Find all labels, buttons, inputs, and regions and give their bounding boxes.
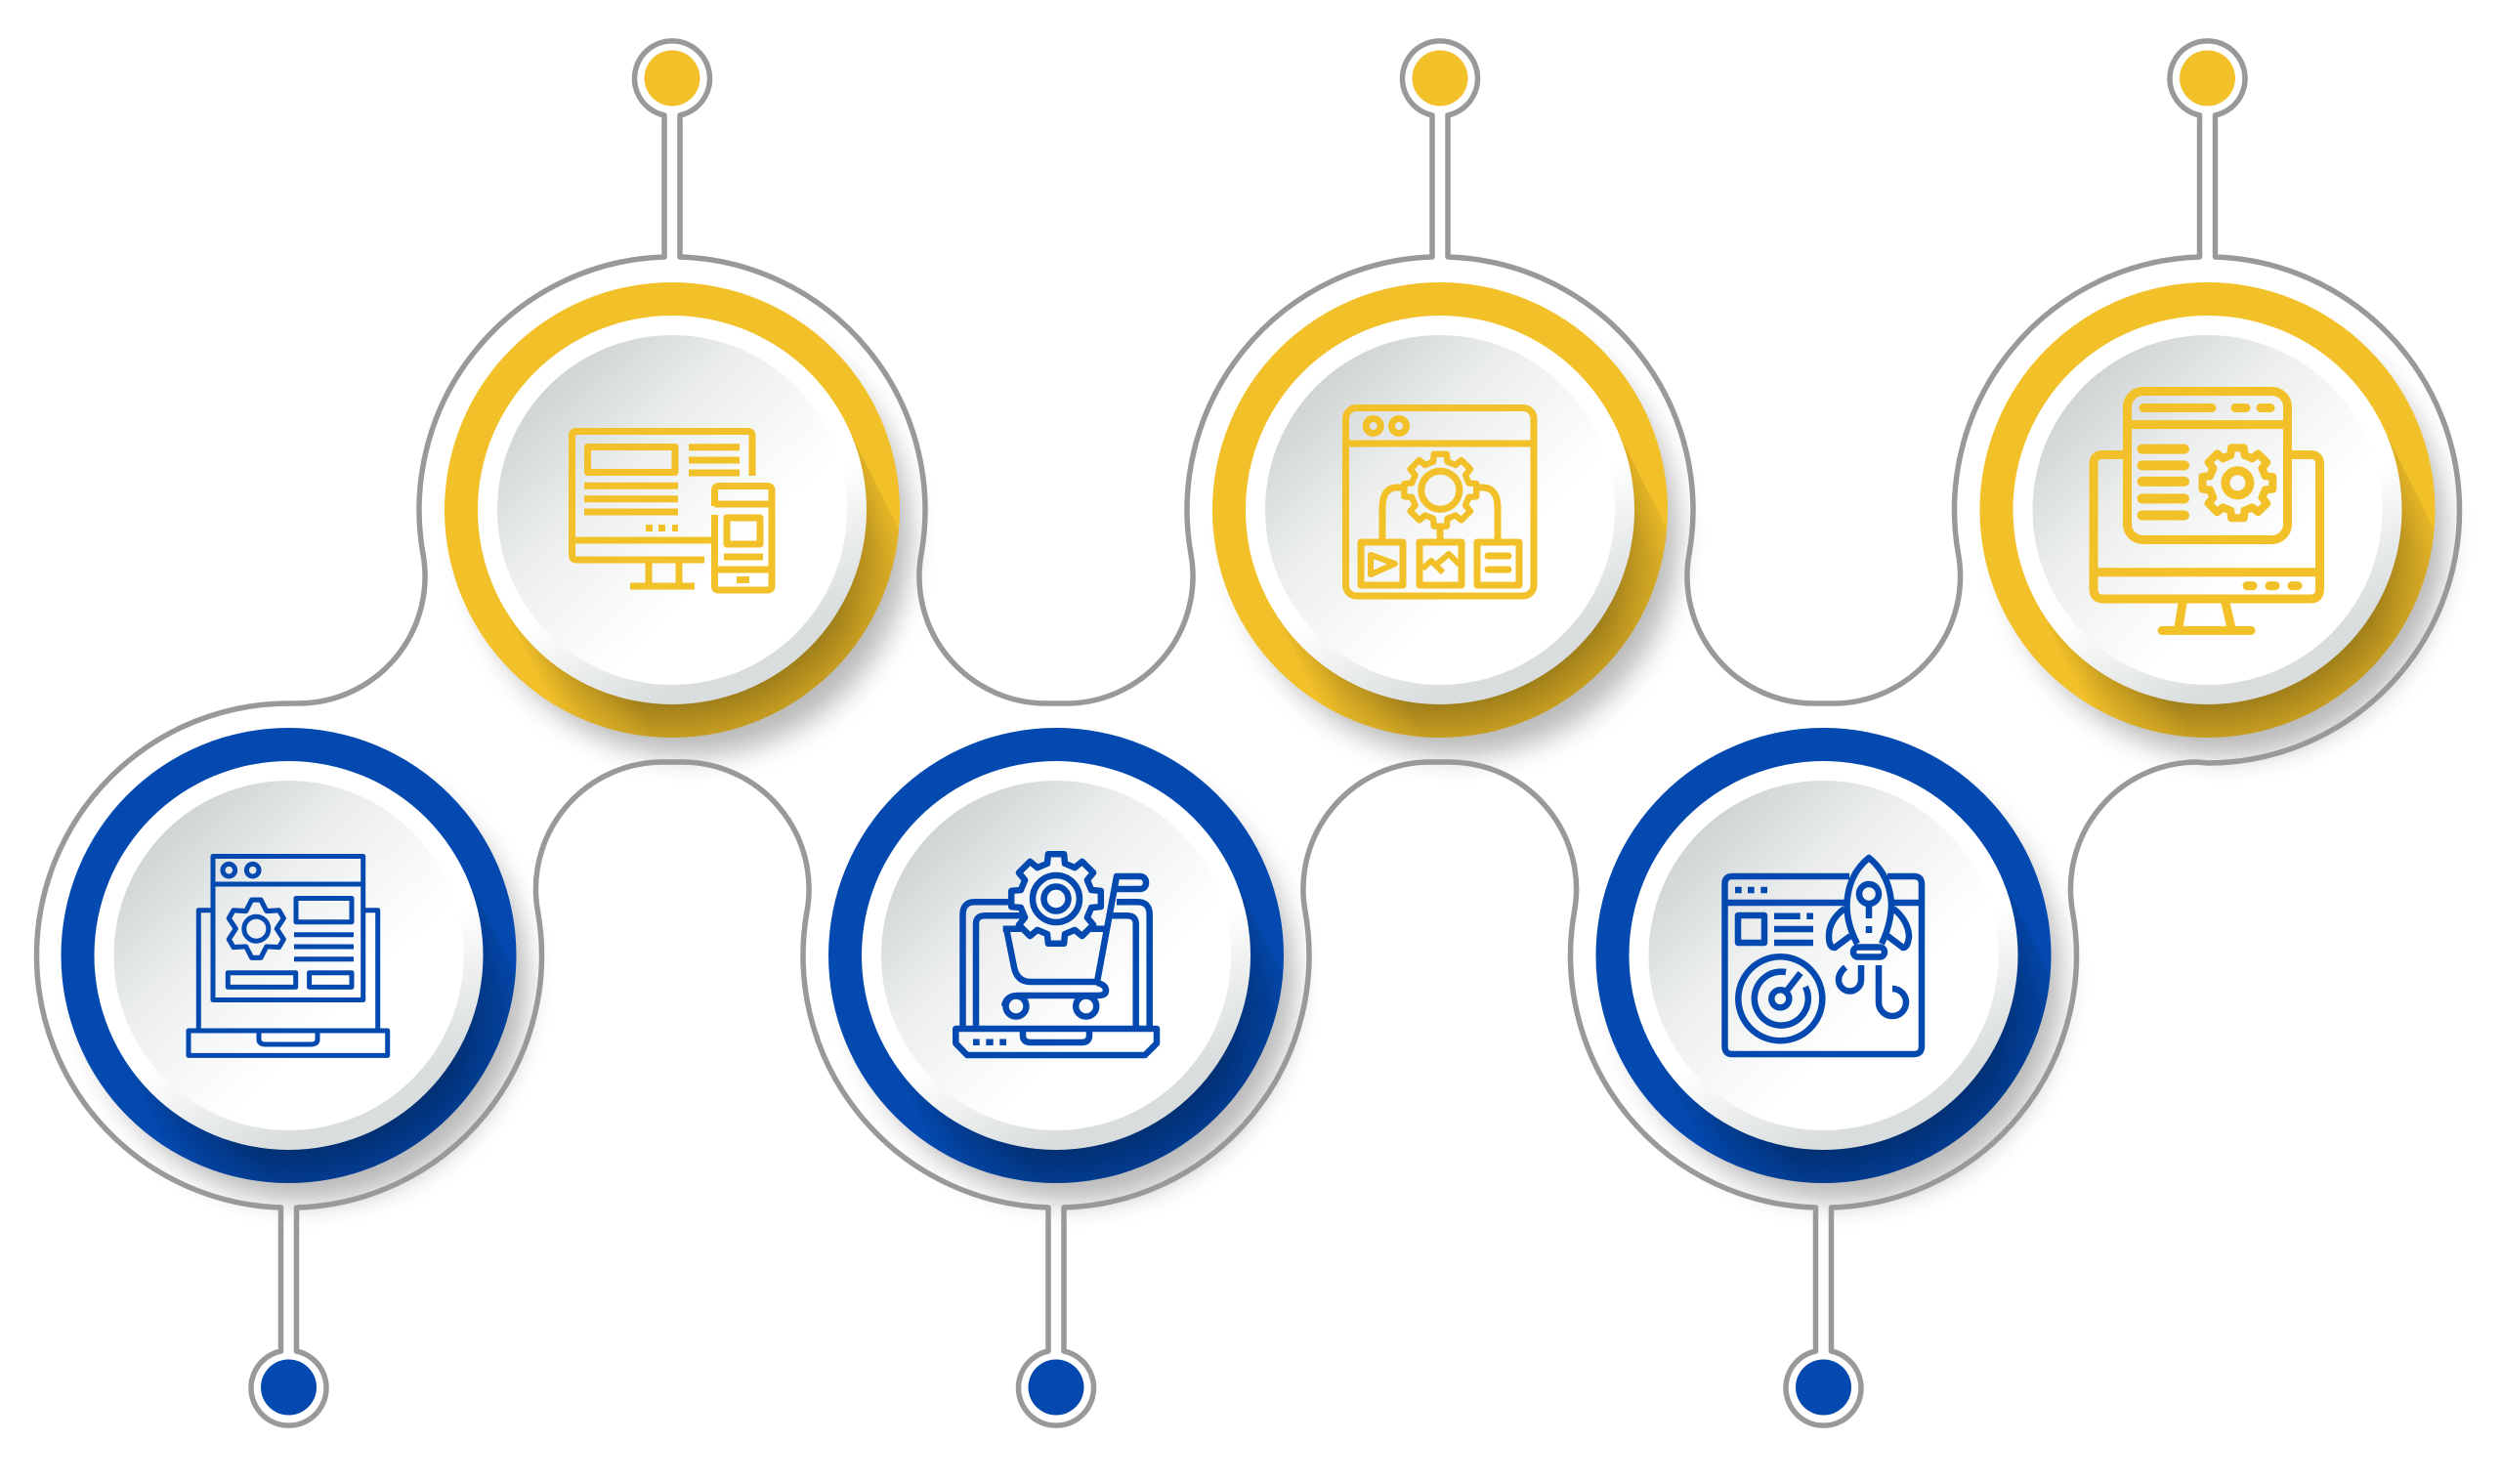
panel: step 4 yellow [1212,51,1722,815]
node dot [261,1360,317,1415]
ring disc [1212,282,1668,738]
node dot [645,51,699,106]
soft drop shadows behind rings [86,315,2446,1202]
white base under node dots [252,1350,1860,1424]
node dot [1028,1360,1084,1415]
node dot [1796,1360,1851,1415]
ring disc [1979,282,2435,738]
icon: monitor with settings window [2094,391,2319,630]
icon: browser with rocket and radar gauge [1725,858,1922,1054]
node dot [1413,51,1467,106]
panel: step 3 blue [828,728,1338,1415]
panel: step 2 yellow [445,51,954,815]
ring disc [828,728,1284,1183]
node dot [2180,51,2235,106]
icon: laptop with shopping cart and gear [955,854,1157,1055]
panel: step 5 blue [1596,728,2106,1415]
ring disc [445,282,900,738]
icon: browser window with media workflow [1346,408,1534,596]
icon: laptop with settings window [189,856,388,1055]
ring disc [1596,728,2052,1183]
panel: step 6 yellow [1979,51,2435,738]
ring disc [61,728,516,1183]
icon: desktop and phone layouts [572,432,772,590]
panel: step 1 blue [61,728,571,1415]
